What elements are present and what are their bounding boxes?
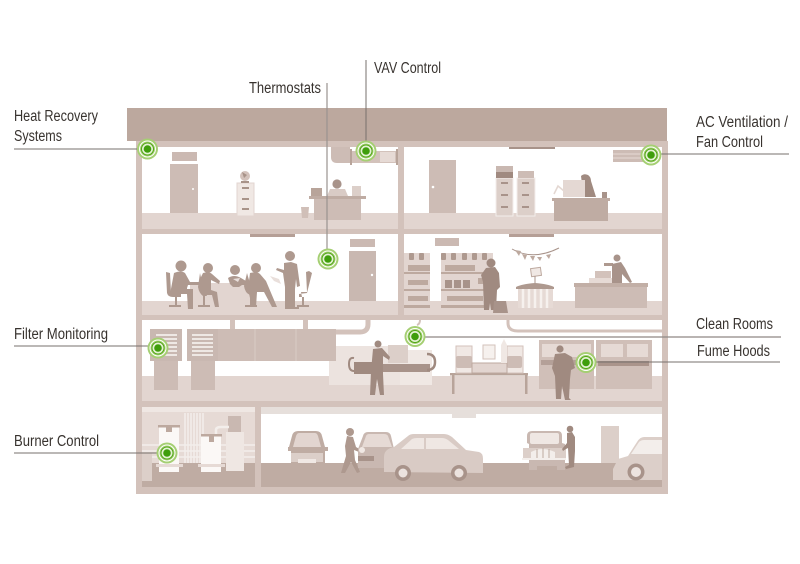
room: laboratory and ducts <box>150 320 662 400</box>
icon: sensor Clean Rooms <box>404 326 426 347</box>
callout: Filter Monitoring: Filter Monitoring <box>14 326 108 343</box>
callout: Heat Recovery Systems <box>14 108 147 149</box>
icon: sensor Filter <box>148 338 168 358</box>
room: meeting room <box>166 234 376 309</box>
room: private office <box>429 147 650 221</box>
callout: Clean Rooms: Clean Rooms <box>696 316 773 333</box>
building shell <box>127 108 668 494</box>
callout: Fume Hoods: Fume Hoods <box>697 343 770 360</box>
person: man by jeep <box>562 426 575 469</box>
callout: AC Ventilation / Fan Control: Fan Control <box>696 134 763 151</box>
icon: sensor AC <box>640 144 662 166</box>
room: office reception <box>170 147 398 220</box>
callout: Heat Recovery Systems: Systems <box>14 128 62 145</box>
car: side view right <box>613 437 662 480</box>
callout: VAV Control <box>366 60 441 151</box>
icon: sensor Burner <box>156 442 178 464</box>
callout: Heat Recovery Systems: Heat Recovery <box>14 108 98 125</box>
door: garage <box>601 426 619 463</box>
icon: sensor Heat Recovery <box>137 138 158 160</box>
icon: sensor Fume Hoods <box>576 352 596 373</box>
callout: VAV Control: VAV Control <box>374 60 441 77</box>
icon: sensor Thermostat <box>318 248 338 270</box>
car: front view left <box>288 431 328 469</box>
room: parking garage <box>288 426 662 481</box>
icon: sensor VAV <box>356 140 376 162</box>
callout: AC Ventilation / Fan Control: AC Ventilation / <box>696 114 789 131</box>
car: front view middle <box>358 432 394 468</box>
room: shop <box>404 234 648 313</box>
car: side view large <box>384 434 483 481</box>
car: jeep <box>522 431 566 470</box>
callout: Thermostats: Thermostats <box>249 80 321 97</box>
room: boiler room <box>142 407 255 481</box>
person: walking woman <box>341 428 361 473</box>
callout: Burner Control: Burner Control <box>14 433 99 450</box>
callout: AC Ventilation / Fan Control <box>650 114 789 154</box>
